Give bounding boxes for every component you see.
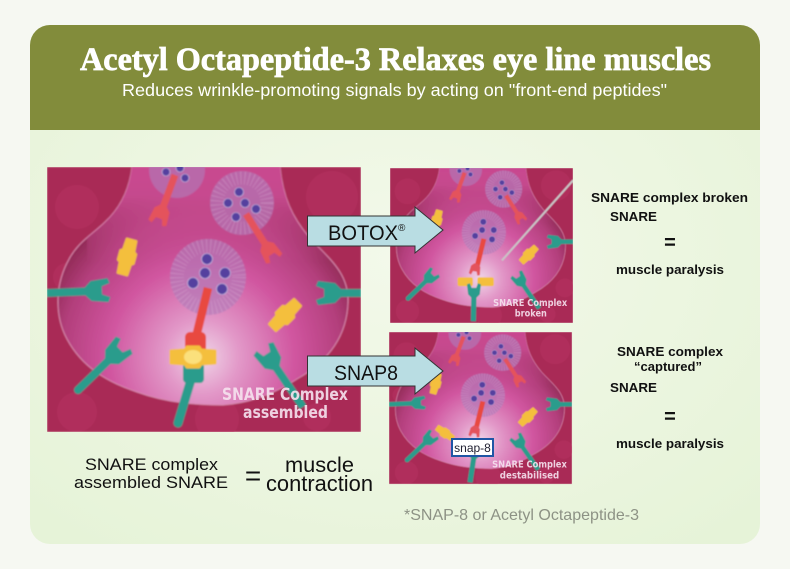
- text: assembled equation: =: [245, 460, 261, 491]
- text: BOTOX effect: muscle paralysis: [616, 262, 724, 277]
- caption: SNARE complex assembled: assembled: [243, 403, 328, 423]
- text: BOTOX effect: SNARE complex broken: [591, 190, 748, 205]
- text: assembled equation: assembled SNARE: [74, 473, 228, 492]
- caption: SNARE complex broken: broken: [515, 309, 547, 320]
- text: SNAP8 effect: muscle paralysis: [616, 436, 724, 451]
- text: BOTOX effect: [591, 190, 748, 277]
- text: assembled equation: muscle: [285, 454, 354, 477]
- text: SNAP8 effect: =: [664, 406, 676, 428]
- footnote: *SNAP-8 or Acetyl Octapeptide-3: [404, 507, 639, 524]
- caption: SNARE complex destabilised: [492, 460, 567, 478]
- caption: SNARE complex broken: [494, 298, 567, 316]
- arrow: BOTOX: ®: [398, 223, 406, 234]
- caption: SNARE complex assembled: [223, 387, 348, 418]
- text: SNAP8 effect: [610, 344, 724, 451]
- text: assembled equation: [74, 454, 373, 496]
- caption: SNARE complex broken: SNARE Complex: [493, 298, 568, 309]
- arrow: BOTOX: [308, 207, 443, 253]
- text: BOTOX effect: SNARE: [610, 209, 657, 224]
- text: assembled equation: contraction: [266, 471, 373, 496]
- caption: SNARE complex destabilised: SNARE Complex: [492, 460, 567, 470]
- text: assembled equation: SNARE complex: [85, 455, 219, 474]
- arrow: SNAP8: [308, 348, 443, 394]
- arrow: BOTOX: BOTOX: [328, 222, 398, 245]
- label: snap-8: snap-8: [454, 441, 491, 455]
- arrow: SNAP8: SNAP8: [334, 362, 398, 385]
- panel: header band: [30, 25, 760, 130]
- caption: SNARE complex destabilised: destabilised: [500, 470, 559, 481]
- text: SNAP8 effect: “captured”: [634, 359, 702, 374]
- panel: SNARE complex assembled diagram: [47, 167, 361, 432]
- panel: SNARE complex destabilised diagram: [389, 332, 572, 484]
- text: BOTOX effect: =: [664, 232, 676, 254]
- title: Acetyl Octapeptide-3 Relaxes eye line muscles: [80, 42, 711, 78]
- panel: SNARE complex broken diagram: [390, 168, 573, 323]
- text: SNAP8 effect: SNARE complex: [617, 344, 724, 359]
- caption: SNARE complex assembled: SNARE Complex: [222, 385, 348, 405]
- text: SNAP8 effect: SNARE: [610, 380, 657, 395]
- subtitle: Reduces wrinkle-promoting signals by acting on "front-end peptides": [122, 80, 667, 100]
